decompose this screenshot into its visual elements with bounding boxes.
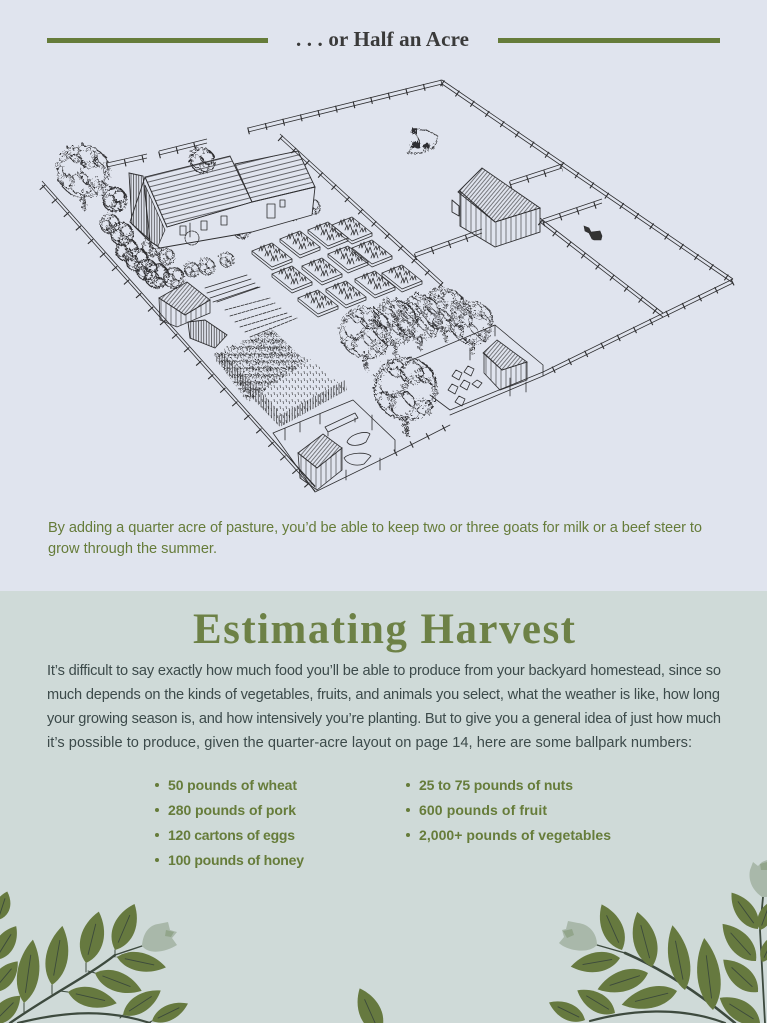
list: left column: 50 pounds of wheat bbox=[168, 777, 297, 793]
bud left bbox=[559, 921, 597, 951]
back fence sections bbox=[107, 80, 442, 167]
garden shed bbox=[159, 282, 210, 327]
patio table bbox=[185, 231, 199, 245]
wheat front edge bbox=[278, 380, 347, 427]
windows and doors bbox=[180, 200, 285, 237]
main roof bbox=[145, 156, 252, 227]
second pig bbox=[344, 453, 371, 465]
grain rows bbox=[225, 298, 297, 337]
paddock barn bbox=[452, 168, 540, 247]
list: left column: 120 cartons of eggs bbox=[168, 827, 295, 843]
chickens bbox=[448, 366, 482, 406]
pasture fence front bbox=[543, 279, 733, 376]
planted rows bbox=[205, 275, 260, 302]
garden divider fence bbox=[280, 134, 443, 287]
goat bbox=[584, 226, 602, 240]
compost bins bbox=[188, 320, 227, 348]
outer fence left edge bbox=[42, 181, 315, 494]
bud top right bbox=[750, 860, 767, 897]
caption: grow through the summer. bbox=[48, 541, 217, 557]
heading: estimating harvest: Estimating Harvest bbox=[193, 606, 576, 653]
raised garden beds bbox=[252, 217, 422, 317]
branch: right foliage bbox=[545, 860, 767, 1023]
illustration: homestead plan bbox=[42, 80, 733, 494]
corn patch bbox=[212, 327, 305, 400]
pig bbox=[347, 432, 370, 445]
leaf: bottom centre bbox=[350, 984, 390, 1023]
house walls bbox=[130, 177, 315, 248]
heading: or half an acre: . . . or Half an Acre bbox=[296, 27, 469, 51]
chicken coop bbox=[483, 340, 527, 390]
list: left column: 280 pounds of pork bbox=[168, 802, 296, 818]
house bbox=[129, 151, 315, 248]
corn side edge bbox=[215, 352, 280, 427]
paddock fences bbox=[415, 164, 663, 317]
icon: large tree by house bbox=[54, 142, 106, 206]
caption: By adding a quarter acre of pasture, you’d be able to keep two or three goats for milk or a beef steer to bbox=[48, 520, 702, 536]
background: lower panel bbox=[0, 591, 767, 1023]
body paragraph: much depends on the kinds of vegetables, fruits, and animals you select, what the weather is like, how long bbox=[47, 687, 720, 703]
icon: bush behind house bbox=[188, 146, 212, 170]
caption bbox=[48, 520, 702, 557]
list: right column bbox=[406, 777, 611, 843]
shrubs around house bbox=[98, 186, 318, 286]
wheat patch bbox=[245, 355, 347, 427]
cow bbox=[406, 126, 436, 152]
pig pen bbox=[273, 400, 450, 492]
chimney bbox=[129, 173, 150, 240]
list: right column: 2,000+ pounds of vegetables bbox=[419, 827, 611, 843]
body paragraph: It’s difficult to say exactly how much food you’ll be able to produce from your backyard homestead, since so bbox=[47, 663, 721, 679]
branch: left foliage bbox=[0, 889, 191, 1023]
title rule left bbox=[47, 38, 268, 43]
wing roof bbox=[235, 151, 315, 202]
pasture fence right bbox=[442, 80, 733, 283]
trough bbox=[325, 413, 358, 436]
list: left column bbox=[155, 777, 304, 868]
body paragraph: your growing season is, and how intensively you’re planting. But to give you a general idea of just how much bbox=[47, 711, 721, 727]
orchard trees bbox=[338, 286, 490, 432]
gable siding bbox=[145, 185, 165, 246]
chicken pen bbox=[407, 325, 543, 415]
pig coop bbox=[298, 434, 342, 490]
title rule right bbox=[498, 38, 720, 43]
body paragraph: it’s possible to produce, given the quarter-acre layout on page 14, here are some ballpark numbers: bbox=[47, 735, 692, 751]
list: right column: 25 to 75 pounds of nuts bbox=[419, 777, 573, 793]
list: right column: 600 pounds of fruit bbox=[419, 802, 547, 818]
bud bbox=[142, 922, 177, 952]
body paragraph bbox=[47, 663, 721, 751]
list: left column: 100 pounds of honey bbox=[168, 852, 304, 868]
